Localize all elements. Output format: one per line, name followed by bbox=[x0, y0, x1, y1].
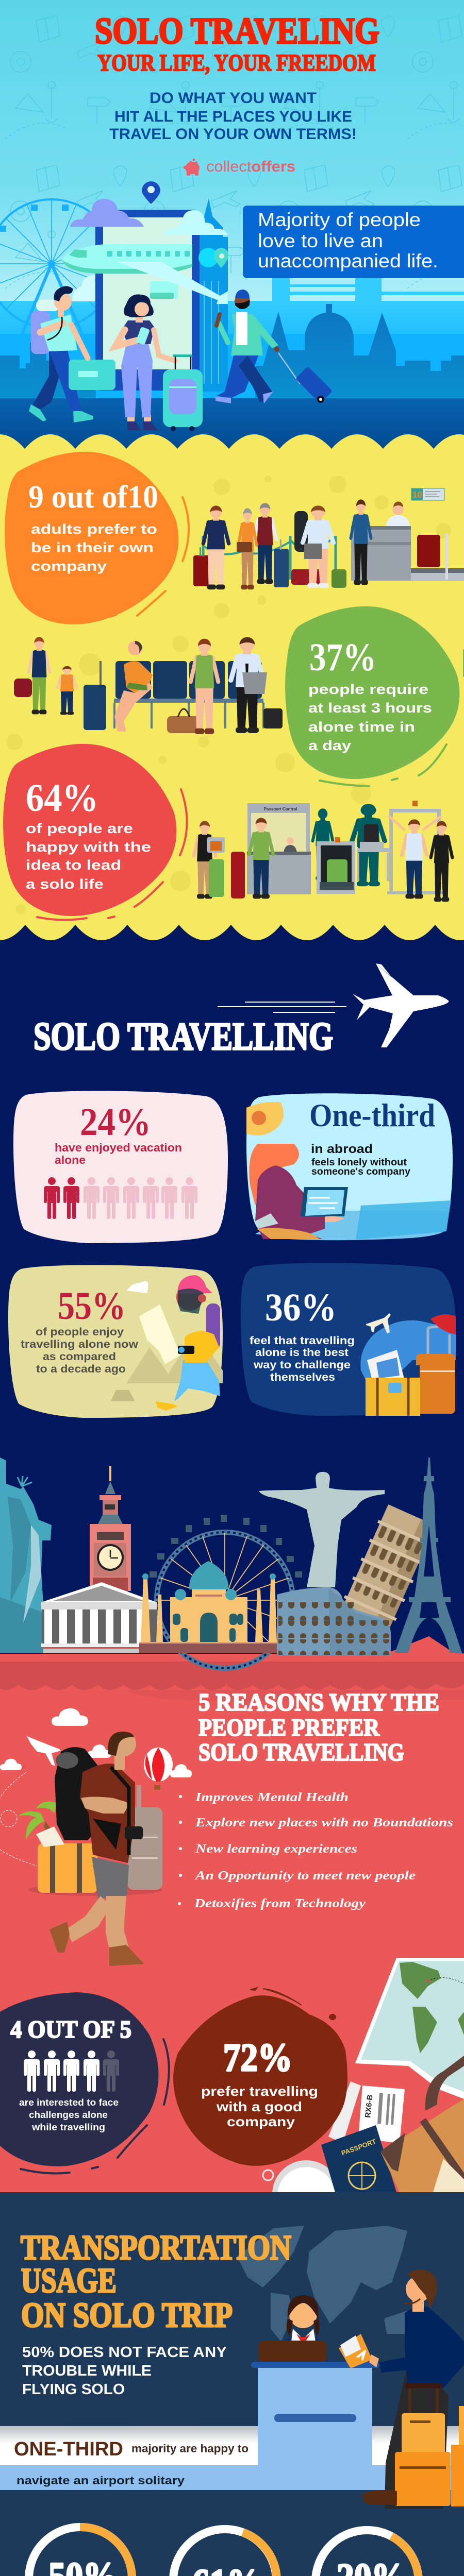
stat: 64 percent: happy with the bbox=[26, 839, 151, 855]
scene: passport control and security: Passport Control bbox=[264, 807, 297, 811]
landmark: statue of liberty bbox=[0, 1458, 52, 1653]
illustration: map, tickets, passport and suitcase: PASSPORT bbox=[340, 2138, 377, 2157]
list: five reasons: Improves Mental Health bbox=[195, 1791, 349, 1804]
card: 55 percent bbox=[8, 1265, 223, 1418]
person: man with hat and trolley bbox=[216, 290, 333, 403]
card: one-third bbox=[246, 1093, 453, 1240]
card: 55 percent: as compared bbox=[43, 1351, 116, 1363]
section: yellow stats background bbox=[0, 434, 464, 958]
card: 24 percent bbox=[13, 1091, 228, 1243]
stat: 37 percent: people require bbox=[308, 682, 428, 697]
donut: 20 percent bbox=[316, 2530, 419, 2576]
text: 50 percent does not face any trouble bbox=[22, 2344, 227, 2398]
illustration: check-in desk with agent and traveller bbox=[251, 2269, 464, 2509]
card: 55 percent: 55% bbox=[58, 1284, 126, 1328]
stat: 72 percent bbox=[173, 1988, 347, 2166]
donut: 61 percent bbox=[173, 2529, 277, 2576]
list: five reasons: New learning experiences bbox=[195, 1842, 357, 1856]
section: navy solo travelling background bbox=[0, 925, 464, 1680]
stat: 72 percent: with a good bbox=[216, 2099, 302, 2114]
world map bbox=[237, 2226, 410, 2342]
stat: 4 out of 5: 4 OUT OF 5 bbox=[10, 2016, 131, 2043]
scene: check-in queue bbox=[193, 488, 464, 589]
card: one-third: in abroad bbox=[311, 1142, 373, 1156]
card: 24 percent: have enjoyed vacation bbox=[55, 1141, 182, 1154]
stat: 72 percent: prefer travelling bbox=[201, 2083, 318, 2099]
list: five reasons: An Opportunity to meet new people bbox=[194, 1869, 416, 1883]
stat: 9 out of 10 bbox=[5, 452, 189, 624]
stat: 64 percent: of people are bbox=[26, 821, 133, 836]
callout: majority of people: Majority of people bbox=[258, 209, 421, 230]
scene: airport waiting area bbox=[14, 637, 283, 734]
big ben bbox=[198, 198, 228, 392]
icon: map pin bbox=[142, 181, 160, 204]
stat: 72 percent: 72% bbox=[223, 2036, 292, 2079]
list: five reasons bbox=[178, 1791, 453, 1910]
stat: 37 percent: a day bbox=[308, 738, 351, 753]
person: man with backpack bbox=[29, 286, 115, 422]
landmark: leaning tower of pisa bbox=[338, 1503, 438, 1635]
scene: passport control and security bbox=[194, 801, 452, 902]
stat: 72 percent: company bbox=[227, 2114, 295, 2129]
stat: 9 out of 10: 9 out of10 bbox=[28, 480, 158, 515]
ferris wheel bbox=[0, 199, 116, 335]
person: woman with suitcase bbox=[115, 294, 175, 430]
list: five reasons: Detoxifies from Technology bbox=[194, 1897, 366, 1910]
stat: 64 percent: a solo life bbox=[26, 876, 104, 892]
stat: 64 percent bbox=[3, 744, 187, 920]
card: 55 percent: travelling alone now bbox=[21, 1338, 139, 1350]
heading: your life, your freedom: YOUR LIFE, YOUR FREEDOM bbox=[97, 49, 376, 76]
card: 24 percent: 24% bbox=[80, 1100, 151, 1144]
clouds bbox=[70, 199, 228, 301]
landmark: big ben bbox=[90, 1466, 131, 1592]
stat: 37 percent: at least 3 hours bbox=[308, 700, 432, 716]
donut: 50 percent bbox=[29, 2527, 132, 2576]
stat: 37 percent: alone time in bbox=[308, 719, 415, 735]
callout: majority of people: unaccompanied life. bbox=[258, 250, 438, 272]
stat: 4 out of 5: challenges alone bbox=[29, 2110, 108, 2120]
card: 36 percent: alone is the best bbox=[255, 1347, 349, 1359]
tagline: HIT ALL THE PLACES YOU LIKE bbox=[114, 108, 352, 125]
card: one-third: someone's company bbox=[311, 1166, 410, 1177]
stat: 4 out of 5: are interested to face bbox=[19, 2097, 119, 2108]
card: one-third: feels lonely without bbox=[311, 1157, 407, 1168]
section: transportation background bbox=[0, 2192, 464, 2576]
landmark: capitol building bbox=[41, 1582, 157, 1653]
card: 36 percent: themselves bbox=[270, 1371, 335, 1383]
suitcase: teal trolley bbox=[163, 354, 203, 431]
landmark: taj mahal bbox=[139, 1561, 277, 1653]
stat: 64 percent: idea to lead bbox=[26, 857, 121, 873]
heading: 5 reasons why: 5 REASONS WHY THE bbox=[198, 1689, 439, 1716]
landmark: christ the redeemer bbox=[259, 1472, 385, 1587]
card: 36 percent: way to challenge bbox=[253, 1359, 351, 1371]
airplane bbox=[62, 244, 228, 304]
card: 55 percent: of people enjoy bbox=[36, 1326, 124, 1338]
stat: 4 out of 5: while travelling bbox=[31, 2122, 105, 2132]
list: five reasons: Explore new places with no Boundations bbox=[195, 1816, 453, 1829]
callout: majority of people bbox=[243, 206, 464, 278]
card: one-third: One-third bbox=[309, 1097, 435, 1133]
illustration: map, tickets, passport and suitcase: RX6-B bbox=[363, 2094, 375, 2118]
stat: 37 percent bbox=[285, 606, 464, 786]
illustration: backpacker bbox=[0, 1708, 192, 1966]
tagline bbox=[109, 90, 357, 143]
tagline: TRAVEL ON YOUR OWN TERMS! bbox=[109, 126, 357, 143]
stat: 9 out of 10: company bbox=[31, 558, 107, 574]
card: 55 percent: to a decade ago bbox=[36, 1363, 126, 1375]
heading: transportation usage: TRANSPORTATION bbox=[21, 2228, 291, 2267]
banner: one-third: ONE-THIRD bbox=[14, 2438, 123, 2460]
scene: check-in queue: 10 bbox=[412, 490, 422, 500]
text: 50 percent does not face any trouble: 50% DOES NOT FACE ANY bbox=[22, 2344, 227, 2361]
card: 24 percent: alone bbox=[55, 1154, 86, 1166]
card: 36 percent: feel that travelling bbox=[250, 1335, 355, 1347]
heading: solo travelling: SOLO TRAVELLING bbox=[34, 1015, 333, 1058]
stat: 64 percent: 64% bbox=[26, 776, 98, 820]
stat: 9 out of 10: adults prefer to bbox=[31, 521, 157, 537]
card: 36 percent bbox=[241, 1263, 456, 1416]
heading: 5 reasons why: PEOPLE PREFER bbox=[198, 1714, 380, 1741]
stat: 9 out of 10: be in their own bbox=[31, 540, 154, 555]
banner: one-third: majority are happy to bbox=[131, 2442, 248, 2455]
text: 50 percent does not face any trouble: TROUBLE WHILE bbox=[22, 2363, 152, 2379]
section: reasons background bbox=[0, 1636, 464, 2195]
logo: collectoffers: collectoffers bbox=[206, 158, 295, 175]
icon: white airplane with speed lines bbox=[218, 963, 449, 1047]
landmark: eiffel tower bbox=[395, 1458, 462, 1653]
landmark: ferris wheel bbox=[150, 1515, 302, 1668]
heading: transportation usage: ON SOLO TRIP bbox=[21, 2295, 233, 2334]
banner: one-third: navigate an airport solitary bbox=[16, 2474, 185, 2487]
stat: 37 percent: 37% bbox=[309, 636, 376, 679]
section: hero background bbox=[0, 0, 464, 450]
text: 50 percent does not face any trouble: FLYING SOLO bbox=[22, 2381, 125, 2398]
stat: 4 out of 5 bbox=[0, 1992, 169, 2173]
tagline: DO WHAT YOU WANT bbox=[150, 90, 317, 107]
illustration: map, tickets, passport and suitcase bbox=[263, 1958, 464, 2228]
heading: 5 reasons why: SOLO TRAVELLING bbox=[198, 1739, 404, 1766]
heading: 5 reasons why bbox=[198, 1689, 439, 1766]
banner: one-third bbox=[0, 2426, 464, 2490]
phone frame bbox=[95, 210, 200, 391]
heading: solo traveling: SOLO TRAVELING bbox=[95, 10, 379, 52]
landmark: colosseum bbox=[277, 1587, 391, 1655]
card: 36 percent: 36% bbox=[265, 1286, 337, 1329]
heading: transportation usage: USAGE bbox=[21, 2261, 117, 2300]
heading: transportation usage bbox=[21, 2228, 291, 2334]
callout: majority of people: love to live an bbox=[258, 230, 383, 251]
